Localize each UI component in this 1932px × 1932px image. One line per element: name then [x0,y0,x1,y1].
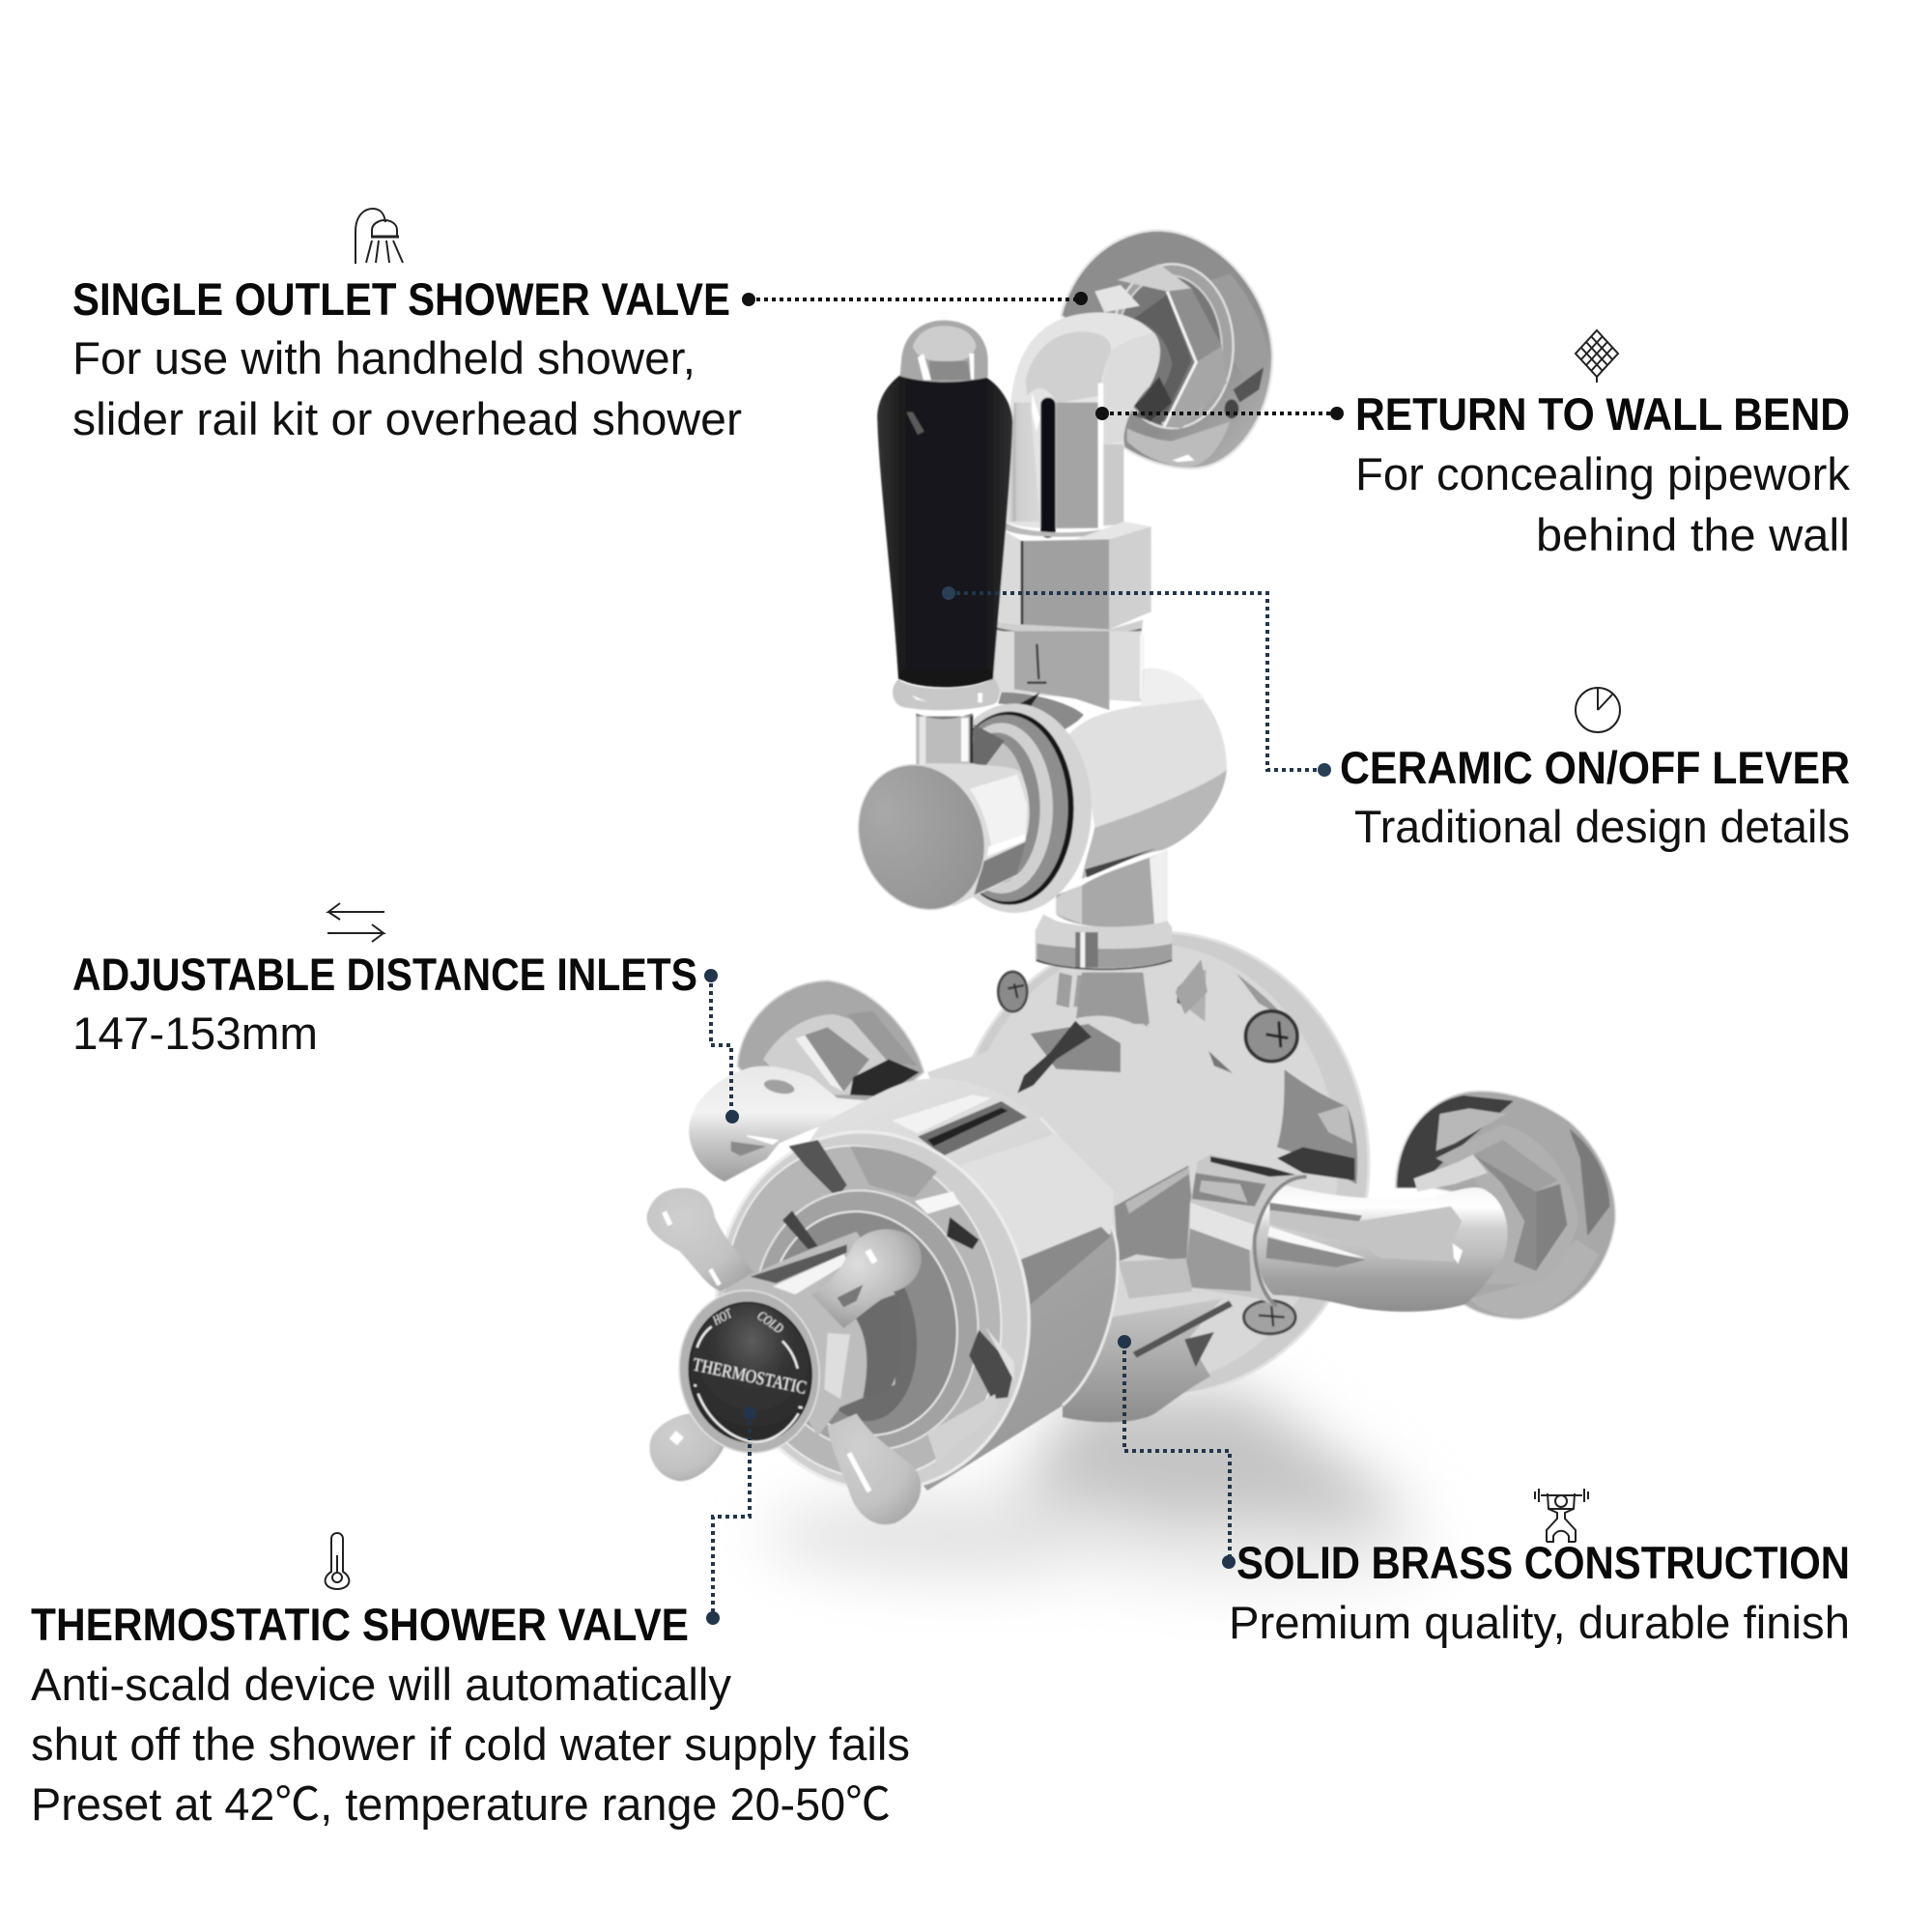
leader: solid brass [1118,1335,1236,1569]
text block: return to wall bend [1355,388,1850,560]
barrel front section [734,1078,1118,1491]
text block: adjustable inlets: ADJUSTABLE DISTANCE INLETS [72,949,697,1000]
neck and collar joining plate [1036,850,1208,1024]
right inlet sleeve [1186,1154,1307,1306]
right inlet hex nut [1414,1125,1578,1284]
leader: return to wall bend [1095,407,1344,420]
heading block: single outlet [72,273,742,444]
leader: ceramic lever [942,586,1331,777]
lever spindle rings [937,703,1092,913]
barrel rear section [927,1015,1265,1406]
thermostatic knob face [668,1281,830,1463]
upper wall flange [1061,230,1272,469]
icon: shower [355,209,403,264]
cross handle upper right arm [811,1229,922,1328]
leader: adjustable inlets [704,969,739,1123]
heading block: single outlet: For use with handheld shower, [72,332,696,384]
valve product render [646,230,1615,1524]
text block: adjustable inlets [72,949,697,1059]
text block: thermostatic valve: Preset at 42℃, temperature range 20-50℃ [31,1778,891,1830]
shadow under valve [763,1391,1439,1589]
text block: ceramic lever: Traditional design details [1354,801,1850,852]
text block: adjustable inlets: 147-153mm [72,1008,318,1059]
text block: ceramic lever: CERAMIC ON/OFF LEVER [1340,742,1850,793]
heading block: single outlet: slider rail kit or overhead shower [72,393,742,444]
right inlet pipe [1257,1184,1508,1312]
leader: single outlet [742,292,1088,306]
text block: return to wall bend: behind the wall [1536,509,1850,560]
icon: weightlifter [1535,1489,1588,1542]
text block: thermostatic valve: Anti-scald device will automatically [31,1659,731,1710]
heading block: single outlet: SINGLE OUTLET SHOWER VALVE [72,273,730,325]
text block: solid brass: Premium quality, durable finish [1229,1597,1850,1648]
barrel underside [1063,1166,1233,1422]
back mounting plate [950,932,1369,1396]
ceramic lever black handle [877,375,1012,687]
cross handle arms [646,1188,921,1524]
lever collar overlap [898,669,993,687]
leader: thermostatic valve [706,1406,756,1625]
text block: ceramic lever [1340,742,1850,852]
text block: return to wall bend: RETURN TO WALL BEND [1355,388,1850,440]
lever stem and collar ring [893,678,1000,766]
text block: thermostatic valve: THERMOSTATIC SHOWER VALVE [31,1599,689,1650]
hex collar [995,522,1151,639]
icon: adjust arrows [327,903,384,942]
text block: return to wall bend: For concealing pipework [1355,448,1850,499]
return to wall elbow [1005,312,1160,538]
thermostatic knob body [723,1232,901,1436]
right inlet wall flange [1395,1092,1615,1319]
text block: thermostatic valve [31,1599,910,1830]
icon: endless knot [1576,330,1618,383]
lever chrome cap [900,321,988,382]
round knob [838,746,1030,928]
knob lettering: COLD [754,1309,785,1337]
knob lettering [691,1306,809,1399]
knob lettering: HOT [710,1306,735,1329]
left inlet wall flange and nut [737,980,924,1101]
knob lettering: THERMOSTATIC [691,1354,809,1399]
text block: solid brass [1229,1537,1850,1648]
valve neck and diverter body [992,631,1227,879]
screws on plate [998,972,1297,1334]
icon: thermometer [326,1533,349,1589]
icon: clock dial [1576,688,1620,732]
upper hex nut and rings [1094,264,1234,428]
text block: solid brass: SOLID BRASS CONSTRUCTION [1236,1537,1850,1588]
barrel front disc [683,1102,1062,1520]
left inlet pipe [689,1066,876,1181]
text block: thermostatic valve: shut off the shower if cold water supply fails [31,1719,910,1770]
